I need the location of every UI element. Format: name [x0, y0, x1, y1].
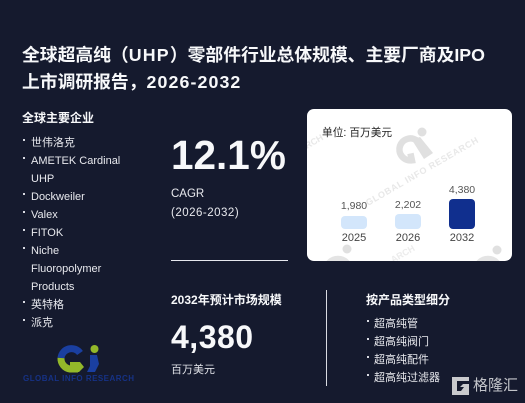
panel: bar chart: [307, 109, 512, 261]
bar: 2025: [341, 200, 367, 244]
title: [22, 45, 485, 92]
market size unit: 百万美元: [171, 364, 215, 376]
product type list: 超高纯过滤器: [374, 372, 440, 384]
company list: AMETEK Cardinal: [31, 155, 120, 167]
bar: 2032: [449, 184, 475, 244]
market size heading: 2032年预计市场规模: [171, 293, 282, 307]
panel: by product type: [366, 293, 450, 384]
company list: Valex: [31, 209, 58, 221]
heading: by product type: 按产品类型细分: [366, 293, 450, 307]
company list: Dockweiler: [31, 191, 85, 203]
company list: Fluoropolymer: [31, 263, 101, 275]
company list: Products: [31, 281, 74, 293]
product type list: 超高纯配件: [374, 354, 429, 366]
logo: Global Info Research: GLOBAL INFO RESEARCH: [23, 374, 134, 383]
stat: 2032 market size: [171, 293, 282, 376]
stat: CAGR: [171, 132, 286, 219]
market size value: 4,380: [171, 319, 254, 355]
panel: global companies: [22, 111, 120, 329]
bar: 2026: 2026: [396, 232, 420, 244]
bar: 2025: 2025: [342, 232, 366, 244]
company list: 派克: [31, 317, 53, 329]
watermark: GLOBAL INFO RESEARCH: [364, 135, 480, 208]
heading: global companies: 全球主要企业: [22, 111, 94, 125]
product type list: 超高纯阀门: [374, 336, 429, 348]
icon: G mark: [452, 377, 469, 395]
chart unit label: 单位: 百万美元: [322, 127, 392, 139]
bar: 2025: 1,980: [341, 200, 367, 212]
title: 上市调研报告，2026-2032: [22, 72, 241, 92]
product type list: [367, 318, 440, 384]
company list: 世伟洛克: [31, 137, 75, 149]
bar: 2026: 2,202: [395, 199, 421, 211]
logo: Global Info Research: [23, 345, 134, 383]
company list: 英特格: [31, 299, 64, 311]
CAGR label: [171, 188, 239, 219]
bar: 2026: [395, 199, 421, 244]
CAGR value: 12.1%: [171, 132, 286, 178]
CAGR label: CAGR: [171, 188, 204, 200]
brand name: 格隆汇: [473, 377, 518, 394]
watermark: [307, 128, 502, 261]
title: 全球超高纯（UHP）零部件行业总体规模、主要厂商及IPO: [22, 45, 485, 65]
company list: FITOK: [31, 227, 63, 239]
company list: [23, 136, 120, 329]
company list: UHP: [31, 173, 54, 185]
product type list: 超高纯管: [374, 318, 418, 330]
CAGR label: (2026-2032): [171, 207, 239, 219]
bar: 2032: 4,380: [449, 184, 475, 196]
bar: 2032: 2032: [450, 232, 474, 244]
logo: Gelonghui watermark: [452, 377, 518, 395]
company list: Niche: [31, 245, 59, 257]
